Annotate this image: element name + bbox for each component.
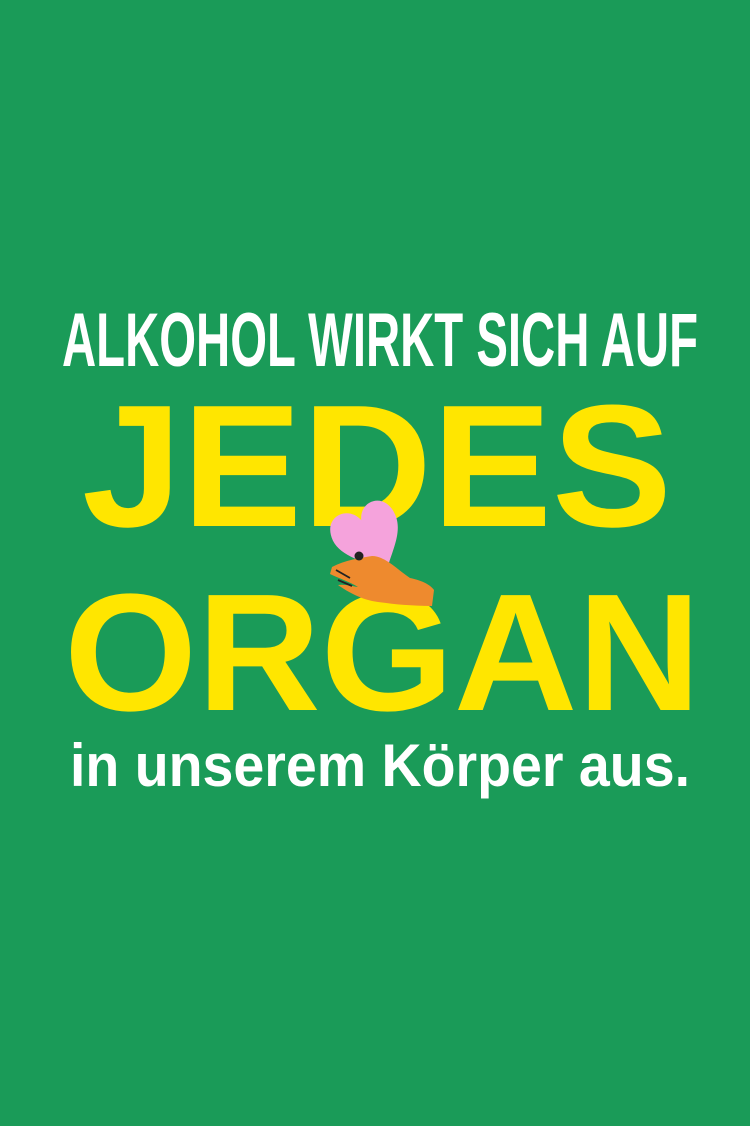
subtitle: in unserem Körper aus. xyxy=(70,732,690,799)
headline: ORGAN: ORGAN xyxy=(64,560,701,746)
icon: hand holding heart xyxy=(325,496,434,606)
headline: JEDES: JEDES xyxy=(82,368,672,563)
